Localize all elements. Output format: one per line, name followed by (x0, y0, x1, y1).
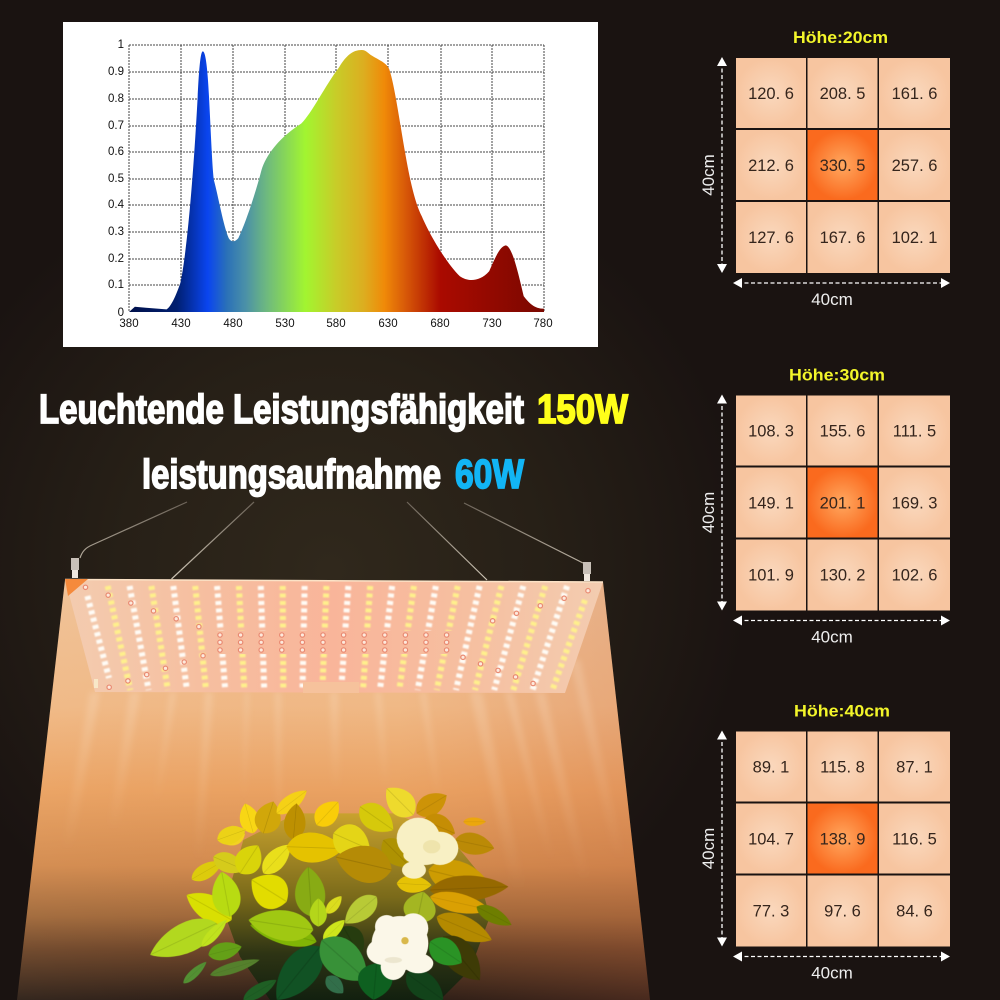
y axis labels: 0.9 (108, 66, 124, 78)
white LED columns (87, 586, 567, 690)
values (748, 85, 937, 247)
heat grid (736, 396, 950, 610)
values: 161. 6 (892, 85, 937, 103)
values: 97. 6 (824, 902, 861, 920)
values: 127. 6 (748, 229, 794, 247)
label: width: 40cm (811, 290, 853, 309)
heading: luminous capacity: Leuchtende Leistungsfähigkeit (39, 386, 524, 432)
light beam (17, 580, 650, 1000)
heat grid (736, 732, 950, 946)
values: 108. 3 (748, 422, 794, 440)
arrow: width dimension (733, 952, 950, 962)
light cone (17, 580, 650, 1000)
values: 120. 6 (748, 85, 794, 103)
panel board (65, 579, 603, 693)
values: 138. 9 (820, 830, 865, 848)
values: 257. 6 (892, 157, 937, 175)
x axis labels: 580 (326, 318, 346, 330)
label: width: 40cm (811, 628, 853, 646)
values: 155. 6 (820, 422, 865, 440)
panel: light spectrum chart (63, 22, 598, 347)
heading: power consumption: 60W (455, 451, 524, 497)
values: 115. 8 (820, 758, 865, 776)
values: 84. 6 (896, 902, 933, 920)
panel: height 30cm measurements (699, 366, 950, 646)
heading: Höhe:20cm (793, 28, 888, 47)
values: 201. 1 (820, 494, 865, 512)
values (748, 422, 937, 584)
heading: power consumption: leistungsaufnahme (142, 451, 441, 497)
beam side tint (17, 580, 650, 1000)
heat grid (736, 58, 950, 273)
foliage base (223, 813, 490, 1000)
panel centre band (205, 631, 460, 654)
panel: height 20cm measurements (699, 28, 950, 309)
orange corner (65, 579, 88, 596)
y axis labels (108, 39, 125, 319)
values: 89. 1 (753, 758, 789, 776)
y axis labels: 0.6 (108, 146, 124, 158)
suspension wires (80, 502, 583, 580)
spectrum curve (129, 50, 544, 312)
hanging clip: right (583, 562, 591, 581)
values: 102. 6 (892, 566, 937, 584)
chart gridlines (129, 45, 544, 312)
hanging clip: left (71, 558, 79, 578)
label: width: 40cm (811, 964, 853, 982)
warm yellow LED columns (108, 586, 585, 690)
y axis labels: 0.3 (108, 226, 124, 238)
values: 208. 5 (820, 85, 865, 103)
arrow: width dimension (733, 616, 950, 626)
x axis labels: 680 (430, 318, 450, 330)
y axis labels: 0.4 (108, 199, 125, 211)
x axis labels: 380 (119, 318, 139, 330)
y axis labels: 0.2 (108, 253, 124, 265)
panel: height 40cm measurements (699, 702, 950, 982)
values (748, 758, 937, 920)
x axis labels: 780 (533, 318, 553, 330)
arrow: height dimension (717, 730, 727, 946)
red LED rings (86, 587, 588, 690)
label: depth: 40cm (699, 154, 718, 196)
x axis labels: 430 (171, 318, 191, 330)
values: 149. 1 (748, 494, 794, 512)
LED cluster beside driver (282, 682, 378, 688)
values: 330. 5 (820, 157, 865, 175)
y axis labels: 1 (118, 39, 124, 51)
values: 111. 5 (893, 422, 936, 440)
x axis labels: 480 (223, 318, 243, 330)
driver tab (303, 682, 359, 693)
values: 101. 9 (748, 566, 794, 584)
values: 87. 1 (896, 758, 933, 776)
light rays (62, 660, 625, 890)
values: 102. 1 (892, 229, 937, 247)
background glow (0, 150, 750, 1000)
x axis labels: 730 (482, 318, 502, 330)
y axis labels: 0.8 (108, 93, 124, 105)
values: 116. 5 (892, 830, 937, 848)
x axis labels (119, 318, 553, 330)
label: depth: 40cm (699, 828, 718, 869)
values: 212. 6 (748, 157, 794, 175)
label: depth: 40cm (699, 492, 718, 533)
connector (94, 679, 98, 688)
values: 130. 2 (820, 566, 865, 584)
values: 167. 6 (820, 229, 865, 247)
y axis labels: 0 (118, 307, 124, 319)
arrow: height dimension (717, 394, 727, 610)
leaves (144, 779, 515, 1000)
flower: lower gardenia (367, 913, 433, 980)
x axis labels: 630 (378, 318, 398, 330)
plant (144, 779, 515, 1000)
chart background (63, 22, 598, 347)
y axis labels: 0.7 (108, 120, 124, 132)
flower: upper gardenia (397, 818, 458, 879)
y axis labels: 0.1 (108, 279, 124, 291)
panel top edge (65, 580, 603, 582)
values: 104. 7 (748, 830, 794, 848)
heading: Höhe:30cm (789, 366, 885, 384)
x axis labels: 530 (275, 318, 295, 330)
heading: Höhe:40cm (794, 702, 890, 720)
LED panel (65, 579, 603, 693)
values: 169. 3 (892, 494, 937, 512)
heading: luminous capacity: 150W (537, 386, 628, 432)
y axis labels: 0.5 (108, 173, 124, 185)
arrow: height dimension (717, 57, 727, 273)
values: 77. 3 (753, 902, 789, 920)
arrow: width dimension (733, 278, 950, 288)
